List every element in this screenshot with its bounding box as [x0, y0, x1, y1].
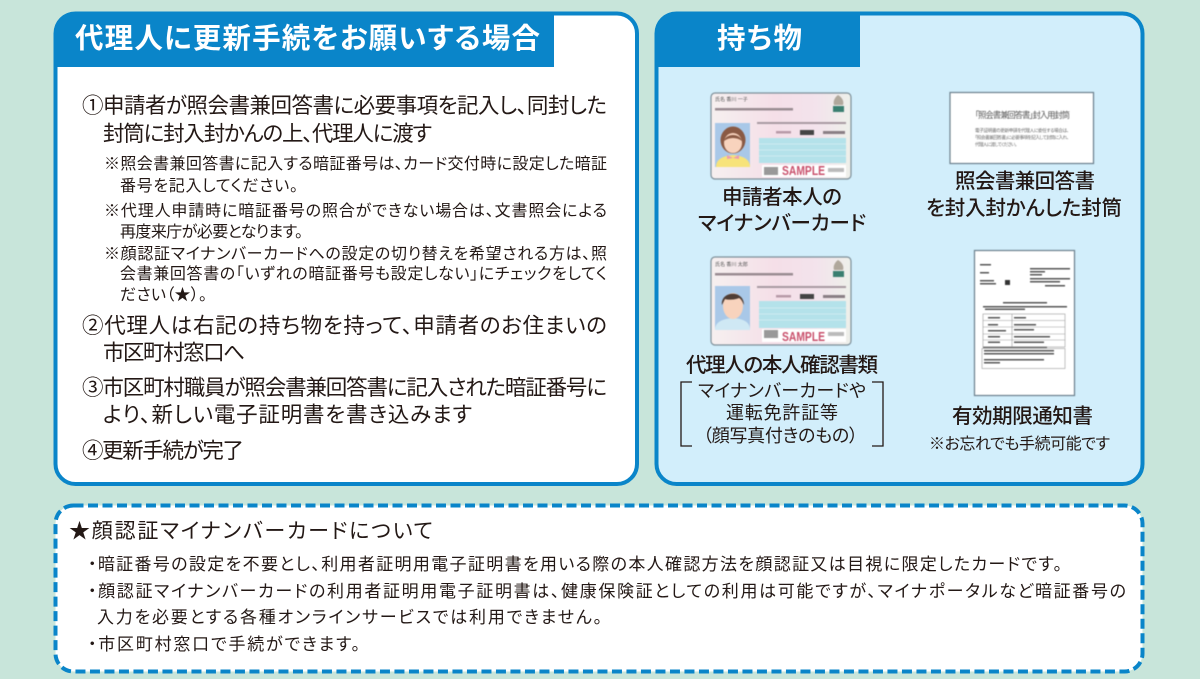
item: proxy's identification: [681, 257, 883, 446]
caption: envelope: 照会書兼回答書: [955, 169, 1095, 193]
bullet list: 入力を必要とする各種オンラインサービスでは利用できません。: [97, 608, 602, 627]
envelope illustration: 「照会書兼回答書」封入用封筒: [975, 110, 1070, 120]
step 4: ④更新手続が完了: [82, 439, 244, 463]
panel: about face-authentication card: [56, 506, 1142, 672]
caption: proxy's identification: [686, 354, 878, 446]
caption: proxy's identification: （顔写真付きのもの）: [703, 426, 858, 446]
item: sealed envelope: [926, 92, 1122, 220]
step 2: 市区町村窓口へ: [103, 341, 245, 365]
card illustration: woman: SAMPLE: [782, 163, 825, 178]
caption: expiry notice: [929, 405, 1110, 453]
bullet list: ・顔認証マイナンバーカードの利用者証明用電子証明書は、健康保険証としての利用は可能ですが、マイナポータルなど暗証番号の: [88, 582, 1126, 601]
step 2: ②代理人は右記の持ち物を持って、申請者のお住まいの: [82, 314, 607, 338]
bullet list: [88, 555, 1126, 654]
caption: expiry notice: 有効期限通知書: [952, 405, 1093, 428]
step 3: [82, 376, 607, 427]
caption: proxy's identification: マイナンバーカードや: [698, 381, 866, 401]
notes for step 1: [104, 155, 607, 304]
envelope illustration: [950, 92, 1094, 164]
heading band: proxy renewal procedure: [54, 12, 554, 67]
step 3: より、新しい電子証明書を書き込みます: [103, 403, 472, 427]
heading: about face-authentication card: ★顔認証マイナンバーカードについて: [69, 520, 433, 543]
heading band: items to bring: [655, 12, 860, 67]
envelope illustration: 「照会書兼回答書」に必要事項を記入して封筒に入れ、: [975, 134, 1069, 141]
bullet list: ・暗証番号の設定を不要とし、利用者証明用電子証明書を用いる際の本人確認方法を顔認証又は目視に限定したカードです。: [88, 555, 1062, 574]
heading band: proxy renewal procedure: 代理人に更新手続をお願いする場合: [75, 23, 540, 55]
notes for step 1: ※照会書兼回答書に記入する暗証番号は、カード交付時に設定した暗証: [104, 155, 607, 173]
card illustration: woman: [711, 93, 851, 179]
document illustration: [974, 250, 1074, 396]
step 1: [82, 94, 607, 146]
notes for step 1: 会書兼回答書の「いずれの暗証番号も設定しない」にチェックをしてく: [120, 265, 607, 283]
notes for step 1: ださい（★）。: [120, 286, 207, 304]
step 1: ①申請者が照会書兼回答書に必要事項を記入し、同封した: [82, 94, 607, 118]
caption: envelope: [926, 169, 1122, 220]
item: expiry notice: [929, 250, 1110, 453]
step 2: [82, 314, 607, 365]
card illustration: man: 氏名 香川 太郎: [715, 261, 748, 268]
caption: envelope: を封入封かんした封筒: [926, 197, 1122, 220]
bullet list: ・市区町村窓口で手続ができます。: [88, 635, 360, 654]
caption: proxy's identification: 運転免許証等: [726, 403, 838, 423]
caption: applicant's card: マイナンバーカード: [698, 212, 866, 235]
notes for step 1: 番号を記入してください。: [120, 177, 298, 195]
brackets: [681, 382, 883, 446]
caption: expiry notice: ※お忘れでも手続可能です: [929, 435, 1110, 453]
notes for step 1: 再度来庁が必要となります。: [120, 223, 303, 241]
caption: applicant's card: [698, 186, 866, 235]
caption: applicant's card: 申請者本人の: [722, 186, 842, 209]
step 1: 封筒に封入封かんの上、代理人に渡す: [103, 122, 432, 146]
envelope illustration: 代理人に渡してください。: [975, 141, 1017, 148]
notes for step 1: ※代理人申請時に暗証番号の照合ができない場合は、文書照会による: [104, 202, 607, 220]
caption: proxy's identification: 代理人の本人確認書類: [686, 354, 878, 377]
card illustration: man: [711, 257, 851, 345]
card illustration: woman: 氏名 香川 一子: [715, 96, 748, 103]
step 3: ③市区町村職員が照会書兼回答書に記入された暗証番号に: [82, 376, 607, 400]
card illustration: man: SAMPLE: [782, 329, 825, 344]
heading band: items to bring: 持ち物: [717, 23, 802, 55]
envelope illustration: 電子証明書の更新申請を代理人に委任する場合は、: [975, 127, 1069, 134]
item: applicant's My Number card: [698, 93, 866, 235]
panel: items to bring: [655, 12, 1142, 484]
notes for step 1: ※顔認証マイナンバーカードへの設定の切り替えを希望される方は、照: [104, 245, 607, 263]
panel: proxy renewal procedure: [54, 12, 637, 484]
